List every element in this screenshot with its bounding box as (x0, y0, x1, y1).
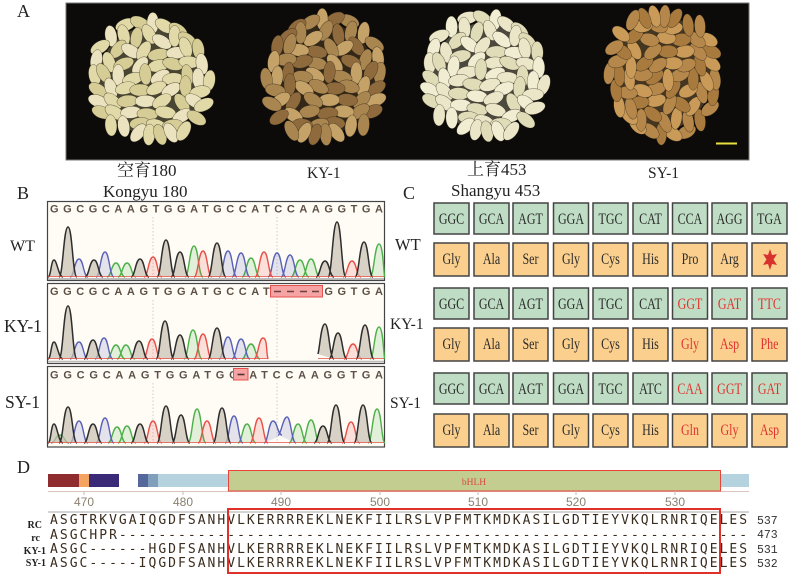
chromatogram KY-1: GGCGCAAGTGGATGCCATCCAAGGTGA (50, 286, 383, 298)
panel C: KY-1 amino acids: Asp (720, 335, 739, 354)
panel C: SY-1 codons: GGC (439, 380, 464, 399)
panel C: SY-1 amino acids: Gly (721, 421, 738, 440)
grains: SY-1 (602, 3, 723, 145)
row label WT right: WT (395, 235, 421, 254)
row label KY-1 left: KY-1 (4, 316, 42, 336)
panel label A: A (17, 1, 30, 21)
panel C: SY-1 codons (434, 373, 787, 404)
panel C: KY-1 codons: GGA (558, 295, 585, 314)
position axis: 520 (566, 495, 586, 509)
panel C: SY-1 amino acids: His (642, 421, 659, 440)
panel label D: D (17, 457, 30, 477)
panel C: SY-1 codons: GCA (479, 380, 505, 399)
panel C: KY-1 codons: GCA (479, 295, 505, 314)
alignment sequences: ASGTRKVGAIQGDFSANHVLKERRRREKLNEKFIILRSLVPFMTKMDKASILGDTIEYVKQLRNRIQELES (50, 513, 749, 528)
position axis: 500 (370, 495, 390, 509)
panel C: KY-1 amino acids: Gly (562, 335, 580, 354)
label: Shangyu 453 in Chinese: 上育453 (467, 160, 526, 179)
panel C: SY-1 amino acids: Asp (760, 421, 779, 440)
panel C: WT codons: GGA (558, 210, 585, 229)
panel C: SY-1 amino acids: Gln (681, 421, 699, 440)
panel C: WT amino acids: Ala (483, 250, 501, 269)
panel C: WT amino acids: Gly (562, 250, 580, 269)
chromatogram SY-1: GGCGCAAGTGGATGC ATCCAAGGTGA (50, 370, 383, 382)
row label KY-1 right: KY-1 (390, 316, 424, 333)
panel label C: C (403, 183, 415, 203)
panel C: WT codons (434, 203, 787, 234)
domain bar (48, 470, 749, 492)
sequence names: rc (31, 533, 41, 544)
panel C: WT codons: GGC (439, 210, 464, 229)
panel label B: B (17, 183, 29, 203)
scale bar (716, 142, 737, 144)
panel C: SY-1 amino acids: Ser (523, 421, 539, 440)
panel C: SY-1 amino acids: Gly (443, 421, 460, 440)
panel C: KY-1 amino acids: Cys (601, 335, 620, 354)
panel C: SY-1 amino acids (434, 414, 787, 447)
sequence names: KY-1 (24, 546, 46, 557)
panel C: KY-1 codons: CAT (639, 295, 662, 314)
alignment sequences: ASGC-----IQGDFSANHVLKERRRREKLNEKFIILRSLVPFMTKMDKASILGDTIEYVKQLRNRIQELES (50, 556, 749, 571)
row label SY-1 right: SY-1 (390, 395, 421, 412)
panel C: SY-1 codons: AGT (518, 380, 543, 399)
panel C: WT amino acids (434, 243, 787, 276)
red box: bHLH region in alignment (228, 509, 720, 573)
alignment sequences (50, 513, 749, 571)
panel C: WT codons: AGT (518, 210, 543, 229)
chromatogram WT (48, 202, 385, 280)
panel C: WT amino acids: Arg (720, 250, 739, 269)
panel C: KY-1 amino acids (434, 328, 787, 361)
panel C: SY-1 amino acids: Ala (483, 421, 501, 440)
panel C: KY-1 amino acids: Ser (523, 335, 539, 354)
panel C: WT amino acids: Cys (601, 250, 620, 269)
grains: KY-1 (259, 8, 388, 147)
panel C: WT codons: TGA (757, 210, 782, 229)
sequence names: RC (28, 520, 42, 531)
residue counts: 473 (757, 529, 778, 542)
panel C: KY-1 amino acids: Phe (761, 335, 778, 354)
label: Kongyu 180 in Chinese: 空育180 (117, 161, 176, 180)
grains: Shangyu 453 (411, 0, 561, 151)
residue counts: 531 (757, 544, 778, 557)
panel C: SY-1 codons: CAA (677, 380, 703, 399)
position axis: 480 (173, 495, 193, 509)
panel C: KY-1 codons: AGT (518, 295, 543, 314)
panel C: KY-1 codons: GGT (678, 295, 703, 314)
panel C: KY-1 amino acids: His (642, 335, 659, 354)
residue counts: 532 (757, 558, 778, 571)
bHLH domain: bHLH (462, 478, 486, 488)
single base deletion highlight (234, 368, 248, 380)
panel C: KY-1 codons (434, 288, 787, 319)
panel C: KY-1 amino acids: Ala (483, 335, 501, 354)
panel C: WT codons: TGC (599, 210, 622, 229)
panel C: WT codons: CCA (678, 210, 703, 229)
panel C: KY-1 codons: GGC (439, 295, 464, 314)
alignment sequences: ASGC------HGDFSANHVLKERRRREKLNEKFIILRSLVPFMTKMDKASILGDTIEYVKQLRNRIQELES (50, 542, 749, 557)
panel C: WT amino acids: Gly (443, 250, 460, 269)
panel C: WT amino acids: His (642, 250, 659, 269)
position axis (48, 491, 749, 512)
panel C: SY-1 codons: GGT (717, 380, 742, 399)
panel C: KY-1 codons: TGC (599, 295, 622, 314)
panel C: KY-1 codons: TTC (758, 295, 781, 314)
icon: red stop star (763, 249, 777, 270)
label: SY-1: SY-1 (648, 165, 679, 182)
position axis: 530 (665, 495, 685, 509)
chromatogram SY-1 (48, 366, 385, 447)
panel C: WT codons: CAT (639, 210, 662, 229)
grains: Kongyu 180 (86, 12, 217, 147)
sequence names: SY-1 (26, 558, 46, 569)
bHLH domain (228, 470, 720, 491)
label: Shangyu 453: Shangyu 453 (451, 181, 540, 200)
chromatogram KY-1 (48, 284, 385, 364)
position axis: 470 (74, 495, 94, 509)
panel C: KY-1 amino acids: Gly (681, 335, 699, 354)
photo background (66, 3, 749, 160)
panel C: SY-1 codons: GGA (558, 380, 585, 399)
panel C: SY-1 amino acids: Gly (562, 421, 580, 440)
row label SY-1 left: SY-1 (5, 392, 40, 412)
panel C: KY-1 codons: GAT (718, 295, 741, 314)
panel C: SY-1 codons: TGC (599, 380, 622, 399)
position axis: 510 (468, 495, 488, 509)
label: KY-1: KY-1 (307, 165, 341, 182)
alignment sequences: ASGCHPR---------------------------------------------------------------- (50, 528, 749, 543)
panel C: KY-1 amino acids: Gly (443, 335, 460, 354)
label: Kongyu 180: Kongyu 180 (103, 182, 188, 201)
panel C: SY-1 codons: ATC (639, 380, 662, 399)
panel C: WT codons: AGG (717, 210, 742, 229)
panel C: SY-1 codons: GAT (758, 380, 781, 399)
chromatogram WT: GGCGCAAGTGGATGCCATCCAAGGTGA (50, 204, 383, 216)
position axis: 490 (271, 495, 291, 509)
panel C: WT amino acids: Pro (682, 250, 698, 269)
deletion highlight (270, 286, 322, 297)
panel C: WT codons: GCA (479, 210, 505, 229)
panel A: rice grain photograph (66, 0, 749, 160)
residue counts (757, 515, 778, 571)
panel C: SY-1 amino acids: Cys (601, 421, 620, 440)
residue counts: 537 (757, 515, 778, 528)
sequence names (24, 520, 46, 569)
row label WT left: WT (10, 238, 35, 255)
panel C: WT amino acids: Ser (523, 250, 539, 269)
